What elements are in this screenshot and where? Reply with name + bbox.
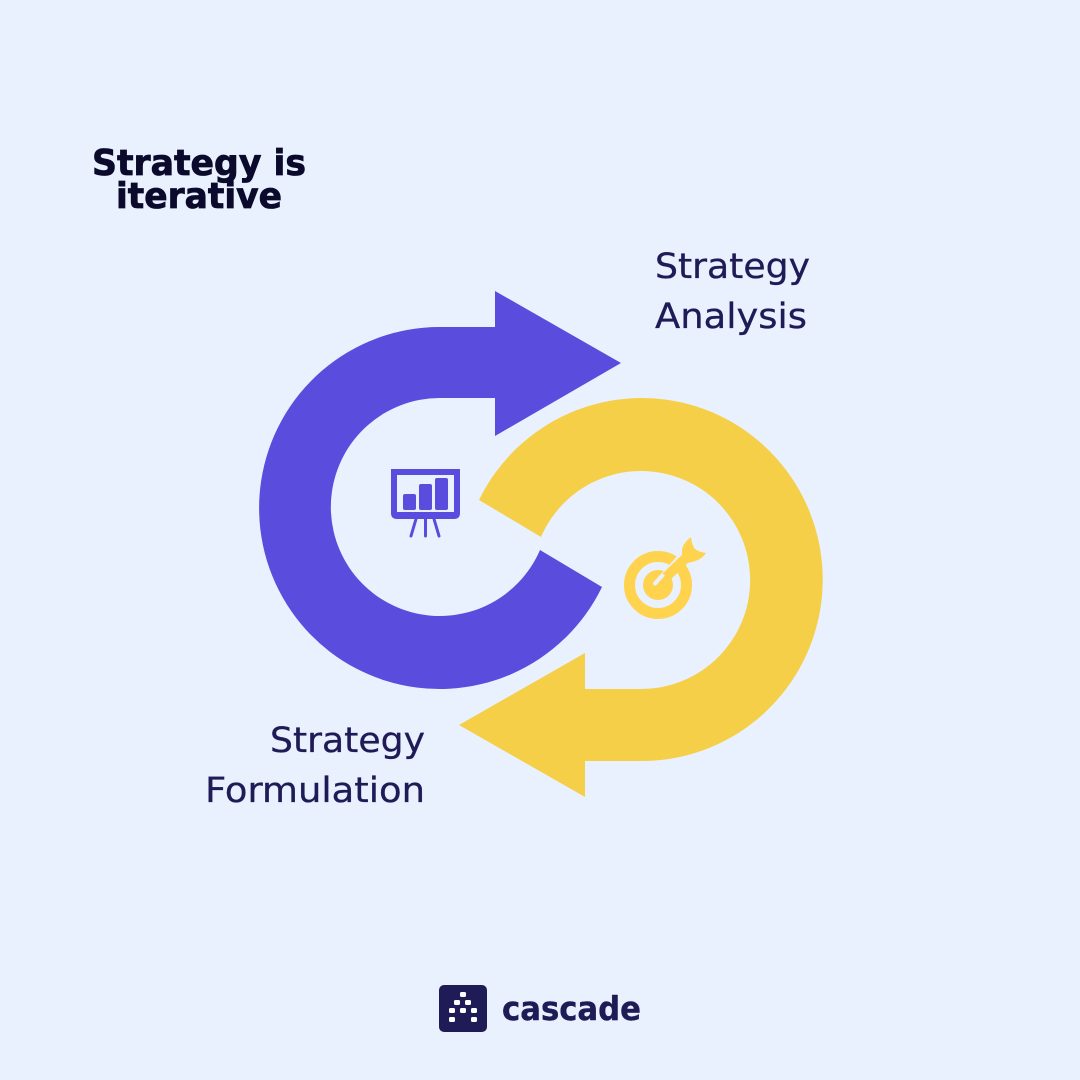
label: strategy analysis: Analysis	[655, 297, 807, 337]
label: strategy formulation: Strategy	[270, 721, 425, 761]
label: strategy formulation	[205, 721, 425, 811]
logo: cascade: cascade	[502, 989, 641, 1028]
icon: logo square	[439, 985, 487, 1032]
label: strategy analysis: Strategy	[655, 247, 810, 287]
icon: presentation board	[391, 469, 460, 536]
title: Strategy is	[92, 143, 306, 184]
arrow: yellow	[459, 398, 823, 797]
icon: target with dart	[630, 537, 706, 614]
title: iterative	[116, 176, 282, 217]
label: strategy formulation: Formulation	[205, 771, 425, 811]
title	[92, 143, 306, 217]
logo: cascade	[439, 985, 641, 1032]
arrow: purple	[259, 291, 621, 689]
label: strategy analysis	[655, 247, 810, 337]
